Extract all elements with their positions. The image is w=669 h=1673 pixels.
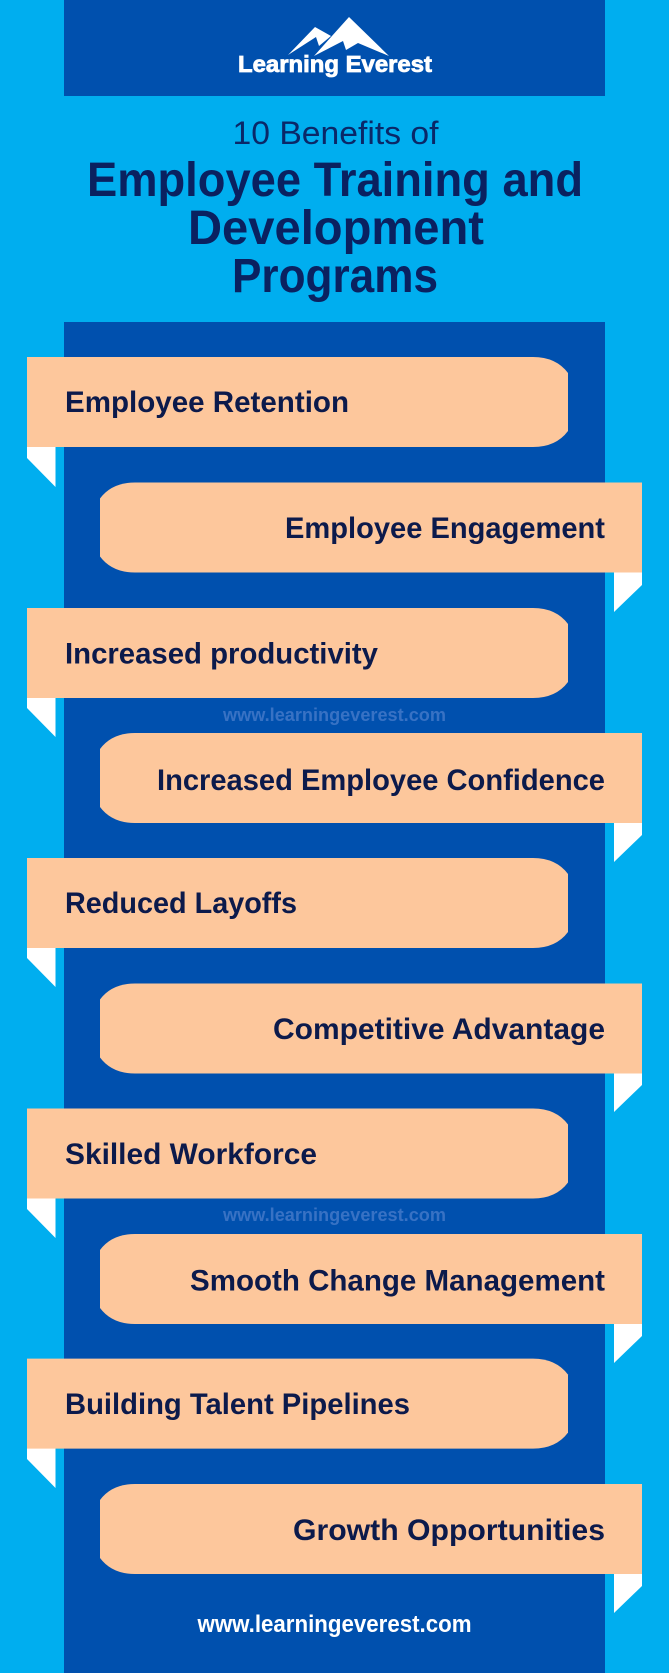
fold [614, 571, 642, 612]
ribbon shape [100, 733, 642, 823]
ribbon 9: Building Talent Pipelines [27, 1359, 568, 1488]
title block [87, 115, 583, 303]
fold [614, 821, 642, 862]
subtitle: 10 Benefits of [232, 115, 439, 151]
ribbon shape [100, 1234, 642, 1324]
fold [27, 696, 56, 737]
label: Smooth Change Management [190, 1264, 605, 1298]
ribbon 7: Skilled Workforce [27, 1108, 568, 1238]
ribbon shape [27, 858, 568, 948]
ribbon 4: Increased Employee Confidence [100, 733, 642, 862]
title line 3: Programs [232, 250, 438, 303]
fold [614, 1071, 642, 1112]
logo: Learning Everest [238, 17, 432, 77]
label: Employee Engagement [285, 512, 605, 545]
fold [27, 1447, 56, 1488]
fold [27, 946, 56, 987]
label: Competitive Advantage [273, 1013, 605, 1046]
ribbon shape [27, 357, 568, 447]
main blue panel [64, 322, 605, 1673]
ribbon shape [100, 482, 642, 572]
ribbon shape [100, 984, 642, 1074]
footer url: www.learningeverest.com [197, 1611, 472, 1638]
ribbon 1: Employee Retention [27, 357, 568, 487]
title line 1: Employee Training and [87, 154, 583, 207]
ribbon shape [27, 1108, 568, 1198]
watermark url 2: www.learningeverest.com [222, 1205, 446, 1225]
label: Increased Employee Confidence [157, 764, 605, 797]
ribbon shape [100, 1484, 642, 1574]
logo wordmark: Learning Everest [238, 51, 432, 77]
ribbon 8: Smooth Change Management [100, 1234, 642, 1363]
ribbon 2: Employee Engagement [100, 482, 642, 612]
ribbon shape [27, 608, 568, 698]
fold [614, 1572, 642, 1613]
ribbon shape [27, 1359, 568, 1449]
ribbon 3: Increased productivity [27, 608, 568, 737]
header band [64, 0, 605, 96]
ribbon 10: Growth Opportunities [100, 1484, 642, 1613]
icon: mountain peaks [288, 17, 389, 56]
watermark url 1: www.learningeverest.com [222, 705, 446, 725]
label: Reduced Layoffs [65, 887, 297, 920]
fold [27, 1197, 56, 1238]
label: Growth Opportunities [293, 1514, 605, 1547]
label: Building Talent Pipelines [65, 1388, 410, 1421]
title line 2: Development [188, 202, 484, 255]
label: Increased productivity [65, 638, 378, 670]
fold [614, 1322, 642, 1363]
ribbon 5: Reduced Layoffs [27, 858, 568, 987]
label: Skilled Workforce [65, 1138, 317, 1171]
ribbon 6: Competitive Advantage [100, 984, 642, 1112]
fold [27, 446, 56, 487]
label: Employee Retention [65, 386, 349, 419]
